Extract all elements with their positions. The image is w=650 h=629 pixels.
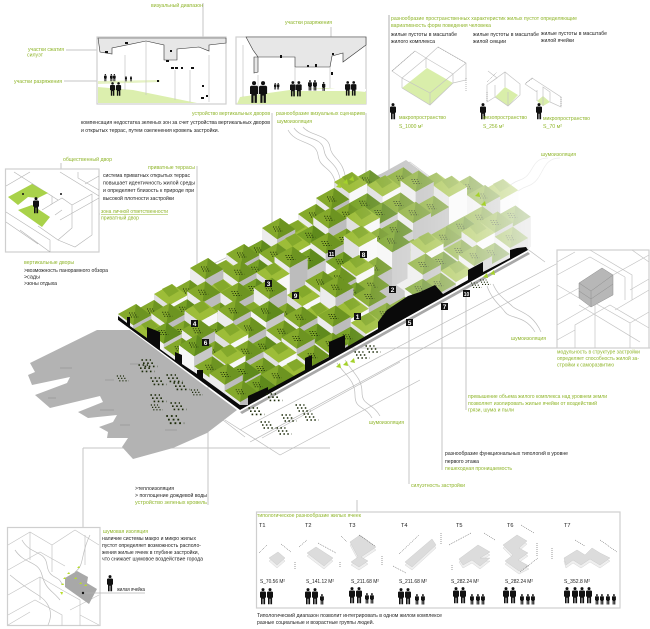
text: vertical courtyards: >сады [24, 274, 40, 280]
number markers: 1 [356, 314, 360, 321]
noise arrows [336, 176, 495, 368]
panel: spatial scale voids: жилые пустоты в масштабе [541, 31, 607, 37]
panel: modularity [557, 250, 649, 348]
number markers [191, 250, 470, 347]
text: elevation above ground: позволяет изолировать жилые ячейки от воздействий [468, 400, 597, 407]
labels: sections [14, 2, 365, 134]
text: green roofs: > поглощение дождевой воды [135, 492, 207, 499]
fade of upper right massing [354, 150, 560, 342]
text: typology summary [257, 612, 442, 626]
text: typology summary: разные социальные и возрастные группы людей. [257, 619, 374, 626]
unit dimensions [259, 525, 617, 573]
panel: spatial scale voids: жилые пустоты в масштабе [391, 32, 457, 38]
text: vertical courtyards: >зоны отдыха [24, 281, 58, 287]
labels: sections: участки разряжения [285, 20, 332, 26]
panel: spatial scale voids [390, 16, 607, 130]
unit headings: T4 [401, 523, 408, 529]
number markers: 11 [329, 252, 334, 258]
text: ground floor typologies: пешеходная проницаемость [445, 466, 512, 472]
unit headings: T2 [305, 523, 312, 529]
panel: spatial scale voids: S_256 м² [483, 124, 504, 130]
ground edge [240, 252, 530, 414]
row 3 [164, 176, 485, 394]
text: modularity: определяет способность жилой за- [557, 355, 639, 362]
people in section 2 [250, 53, 356, 103]
text: modularity: стройки к саморазвитию [557, 362, 614, 368]
text: private terraces [63, 156, 195, 222]
text: modularity [557, 348, 640, 368]
text: acoustic insulation: жилая ячейка [117, 586, 146, 593]
panel: spatial scale voids: макропространство [399, 115, 446, 121]
row 2 [148, 170, 452, 378]
unit areas: S_282.24 M² [451, 579, 479, 585]
noise waves [288, 127, 560, 418]
number markers: 4 [193, 321, 197, 328]
number markers: 3 [267, 281, 271, 288]
unit areas [260, 579, 590, 585]
building massing [118, 150, 560, 410]
text: private terraces: приватные террасы [148, 165, 195, 171]
text: vertical courtyards [24, 260, 109, 287]
text: elevation above ground [468, 394, 607, 414]
text: typology summary: Типологический диапазон позволит интегрировать в одном жилом комплексе [257, 612, 442, 619]
text: acoustic insulation [102, 529, 204, 593]
text: elevation above ground: превышение объема жилого комплекса над уровнем земли [468, 394, 607, 400]
unit areas: S_282.24 M² [505, 579, 533, 585]
number markers: 5 [408, 320, 412, 327]
row 5 [194, 206, 498, 412]
labels: sections: компенсация недостатка зеленых зон за счет устройства вертикальных дворов [81, 119, 270, 126]
text: acoustic insulation: шумовая изоляция [103, 529, 148, 535]
number markers: 2 [391, 287, 395, 294]
text: vertical courtyards: вертикальные дворы [24, 260, 74, 266]
labels: sections: разнообразие визуальных сценариев [276, 111, 365, 117]
unit headings: T5 [456, 523, 463, 529]
text: private terraces: система приватных открытых террас [103, 173, 190, 179]
macro space wireframe [392, 47, 466, 105]
text: green roofs: устройство зеленых кровель [135, 499, 207, 506]
labels: sections: визуальный диапазон [151, 2, 203, 9]
panel: unit typologies [256, 500, 620, 608]
text: elevation above ground: грязи, шума и пыли [468, 408, 514, 414]
unit headings: T7 [564, 523, 571, 529]
black plinth [118, 247, 528, 410]
unit areas: S_211.68 M² [399, 579, 427, 585]
text: green roofs [135, 486, 207, 506]
panel: spatial scale voids: микропространство [543, 116, 590, 122]
text: private terraces: зона личной ответственности [101, 208, 168, 215]
text: acoustic insulation: жения жилые ячеек в глубине застройки, [102, 549, 199, 556]
unit occupants [260, 587, 616, 605]
row 1 [134, 167, 412, 351]
unit headings: T6 [507, 523, 514, 529]
panel: section with relief zones [236, 37, 366, 104]
labels: noise insulation: шумоизоляция [511, 336, 546, 342]
text: private terraces: и определяет близость к природе при [103, 188, 194, 194]
unit areas: S_352.8 M² [564, 579, 590, 585]
row 6 [210, 206, 531, 420]
panel: spatial scale voids: жилой ячейки [541, 37, 574, 44]
text: ground floor typologies [445, 450, 568, 472]
panel: spatial scale voids: S_70 м² [543, 124, 562, 130]
labels: sections: участки разряжения [14, 79, 62, 85]
labels: sections: шумоизоляция [277, 119, 312, 125]
row 7 [224, 226, 528, 410]
text: vertical courtyards: >возможность панорамного обзора [24, 268, 109, 274]
number markers: 7 [443, 304, 447, 311]
people scale [390, 103, 542, 119]
row 4 [179, 179, 518, 397]
text: ground floor typologies: первого этажа [445, 459, 480, 465]
people dots on ground [117, 360, 203, 423]
text: modularity: модульность в структуре застройки [557, 348, 640, 356]
text: private terraces: высокой плотности застройки [103, 195, 174, 202]
text: private terraces: повышает идентичность жилой среды [103, 180, 195, 186]
leader lines [38, 3, 650, 528]
unit areas: S_211.68 M² [351, 579, 379, 585]
number markers: 8 [362, 252, 366, 259]
micro space wireframe [525, 78, 561, 107]
unit areas: S_70.56 M² [260, 579, 285, 585]
text: private terraces: общественный двор [63, 156, 112, 163]
panel: spatial scale voids: жилой секции [473, 38, 506, 45]
panel: section with compression zones [97, 37, 226, 104]
labels: sections: участки сжатия [28, 47, 64, 53]
text: silhouette: силуэтность застройки [411, 482, 465, 489]
meso space wireframe [487, 71, 520, 106]
people in section [104, 42, 208, 99]
number markers: 6 [204, 340, 208, 347]
text: acoustic insulation: наличие системы макро и микро жилых [102, 536, 196, 542]
labels: noise insulation [369, 152, 576, 426]
ground plane [28, 330, 237, 459]
text: green roofs: >теплоизоляция [135, 486, 174, 492]
labels: noise insulation: шумоизоляция [369, 420, 404, 426]
unit headings: T1 [259, 523, 266, 529]
panel: noise insulation plan [8, 528, 145, 626]
panel: spatial scale voids: разнообразие пространственных характеристик жилых пустот определяющие [391, 16, 577, 22]
site outline [200, 162, 560, 455]
panel: spatial scale voids: мезопространство [483, 115, 527, 121]
panel: spatial scale voids: жилые пустоты в масштабе [473, 32, 539, 38]
unit areas: S_141.12 M² [306, 579, 334, 585]
text: acoustic insulation: что снижает шумовое воздействие города [102, 556, 204, 562]
panel: courtyard axonometry [6, 169, 99, 252]
number markers: 10 [464, 292, 469, 298]
number markers: 9 [294, 293, 298, 300]
unit headings [259, 523, 571, 529]
panel: unit typologies: типологическое разнообразие жилых ячеек [257, 513, 361, 519]
text: ground floor typologies: разнообразие функциональных типологий в уровне [445, 450, 568, 457]
text: acoustic insulation: пустот определяет возможность располо- [102, 543, 201, 549]
unit plans [269, 535, 610, 574]
labels: sections: и открытых террас, путем озеленения кровель застройки. [81, 127, 219, 134]
panel: spatial scale voids: S_1000 м² [399, 124, 423, 130]
row 0 [118, 170, 385, 360]
labels: noise insulation: шумоизоляция [541, 152, 576, 158]
front people dots [248, 280, 491, 434]
labels: sections: силуэт [27, 52, 43, 58]
unit headings: T3 [349, 523, 356, 529]
text: private terraces: приватный двор [101, 214, 139, 222]
panel: spatial scale voids: вариативность форм поведения человека [391, 23, 492, 29]
panel: spatial scale voids: жилого комплекса [391, 39, 436, 45]
labels: sections: устройство вертикальных дворов [192, 110, 270, 117]
